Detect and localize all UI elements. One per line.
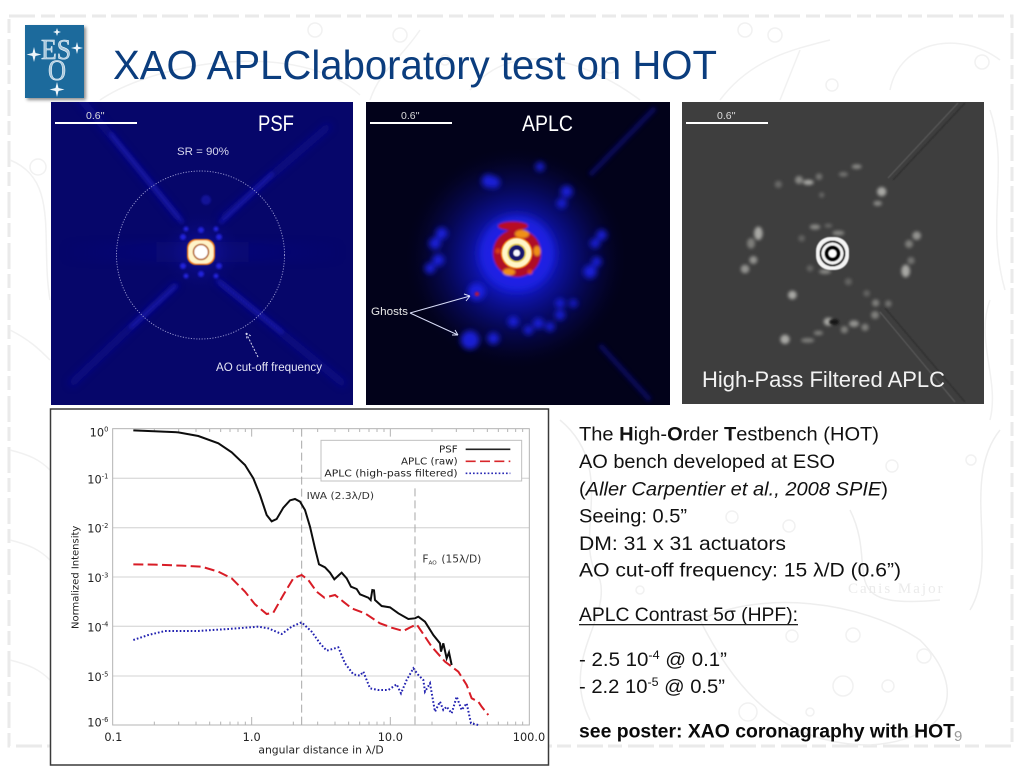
arrow: AO cut-off <box>246 333 258 357</box>
annotations: (15λ/D) <box>441 553 481 566</box>
y axis tick labels: -6 <box>102 716 108 724</box>
annotations: AO <box>428 561 437 567</box>
label Ghosts: Ghosts <box>371 306 409 318</box>
text block: contrast values: -5 <box>647 675 659 689</box>
text block: contrast values: - 2.5 10 <box>579 649 645 671</box>
text block: HOT description: Seeing: 0.5” <box>579 506 687 528</box>
title: XAO APLClaboratory test on HOT <box>113 42 717 88</box>
annotations <box>307 491 481 567</box>
text block: HOT description: AO cut-off frequency: 15 λ/D (0.6”) <box>579 560 901 582</box>
legend: APLC (raw) <box>401 456 458 467</box>
y axis tick labels: -3 <box>102 571 108 579</box>
ESO logo: ES <box>41 34 71 66</box>
legend: PSF <box>439 444 458 455</box>
curve: PSF <box>133 430 452 665</box>
diffuse halo <box>418 159 615 357</box>
page number: 9 <box>954 728 962 745</box>
axes and ticks <box>113 429 529 725</box>
chart: normalized intensity vs angular distance <box>50 409 548 765</box>
y axis tick labels: -5 <box>102 670 108 678</box>
legend: APLC (high-pass filtered) <box>324 468 458 479</box>
y axis title: Normalized Intensity <box>71 526 82 629</box>
y axis tick labels: 0 <box>104 426 108 434</box>
faint horizontal glow <box>141 245 264 259</box>
IWA and F_AO markers <box>302 429 415 725</box>
text block: contrast values: - 2.2 10 <box>579 676 645 698</box>
text block: contrast values: -4 <box>648 648 660 662</box>
scale bar <box>686 110 768 124</box>
x axis tick labels <box>104 730 545 744</box>
panel: APLC image <box>366 102 670 405</box>
ESO logo: O <box>48 54 66 87</box>
label PSF: PSF <box>258 111 294 136</box>
spikes <box>590 108 655 400</box>
y axis tick labels: -1 <box>102 473 108 481</box>
label high-pass filtered APLC: High-Pass Filtered APLC <box>702 367 945 392</box>
core <box>187 239 215 265</box>
red speckle halo <box>479 215 555 291</box>
speckles <box>425 162 607 349</box>
legend <box>321 440 522 481</box>
scale bar <box>55 110 137 124</box>
scale bar: 0.6'' <box>401 110 420 122</box>
speckle ring <box>180 195 222 278</box>
text block: APLC contrast heading: APLC Contrast 5σ (HPF): <box>579 604 798 626</box>
text block: contrast values: @ 0.1” <box>660 649 727 671</box>
faint outer spikes <box>70 92 345 385</box>
y axis tick labels: 10 <box>87 571 102 585</box>
text block: contrast values: @ 0.5” <box>659 676 725 698</box>
y axis tick labels: 10 <box>87 716 102 730</box>
y axis tick labels: -4 <box>102 621 108 629</box>
curve: APLC high-pass filtered <box>133 622 478 725</box>
spikes <box>880 103 958 402</box>
central rings <box>501 237 533 269</box>
text block: HOT description: AO bench developed at ESO <box>579 451 835 473</box>
diffraction spikes near centre <box>110 133 283 333</box>
text block: HOT description <box>579 424 901 582</box>
text block: HOT description: The High-Order Testbench (HOT) <box>579 424 879 446</box>
x axis title: angular distance in λ/D <box>258 745 384 757</box>
dotted AO circle <box>116 171 284 339</box>
central rings <box>816 237 849 270</box>
y axis tick labels: 10 <box>87 472 102 486</box>
y axis tick labels: 10 <box>87 620 102 634</box>
y axis tick labels <box>87 425 108 730</box>
x axis tick labels: 10.0 <box>378 730 403 744</box>
scale bar <box>370 110 452 124</box>
speckles <box>741 164 921 344</box>
scale bar: 0.6'' <box>86 110 105 122</box>
scale bar: 0.6'' <box>717 110 736 122</box>
annotations: IWA (2.3λ/D) <box>307 491 374 502</box>
text block: poster reference: see poster: XAO coronagraphy with HOT <box>579 720 955 742</box>
x axis tick labels: 100.0 <box>513 730 545 744</box>
text block: HOT description: (Aller Carpentier et al., 2008 SPIE ) <box>579 478 888 500</box>
text block: contrast values <box>579 648 727 698</box>
label AO cut-off frequency: AO cut-off frequency <box>216 362 322 374</box>
panel: PSF image <box>51 92 353 405</box>
text block: HOT description: DM: 31 x 31 actuators <box>579 533 786 555</box>
panel: high-pass filtered APLC image <box>682 102 984 404</box>
y axis tick labels: 10 <box>87 670 102 684</box>
annotations: F <box>422 553 428 566</box>
ESO logo <box>25 25 84 98</box>
y axis tick labels: 10 <box>90 425 104 439</box>
y axis tick labels: -2 <box>102 522 108 530</box>
background: star atlas: Canis Major <box>848 581 945 597</box>
x axis tick labels: 1.0 <box>243 730 261 744</box>
label APLC: APLC <box>522 111 573 136</box>
y axis tick labels: 10 <box>87 522 102 536</box>
label Strehl ratio: SR = 90% <box>177 146 229 158</box>
curve: APLC raw <box>133 564 488 715</box>
arrows: ghosts <box>410 294 470 335</box>
grid lines <box>113 478 529 676</box>
x axis tick labels: 0.1 <box>104 730 122 744</box>
